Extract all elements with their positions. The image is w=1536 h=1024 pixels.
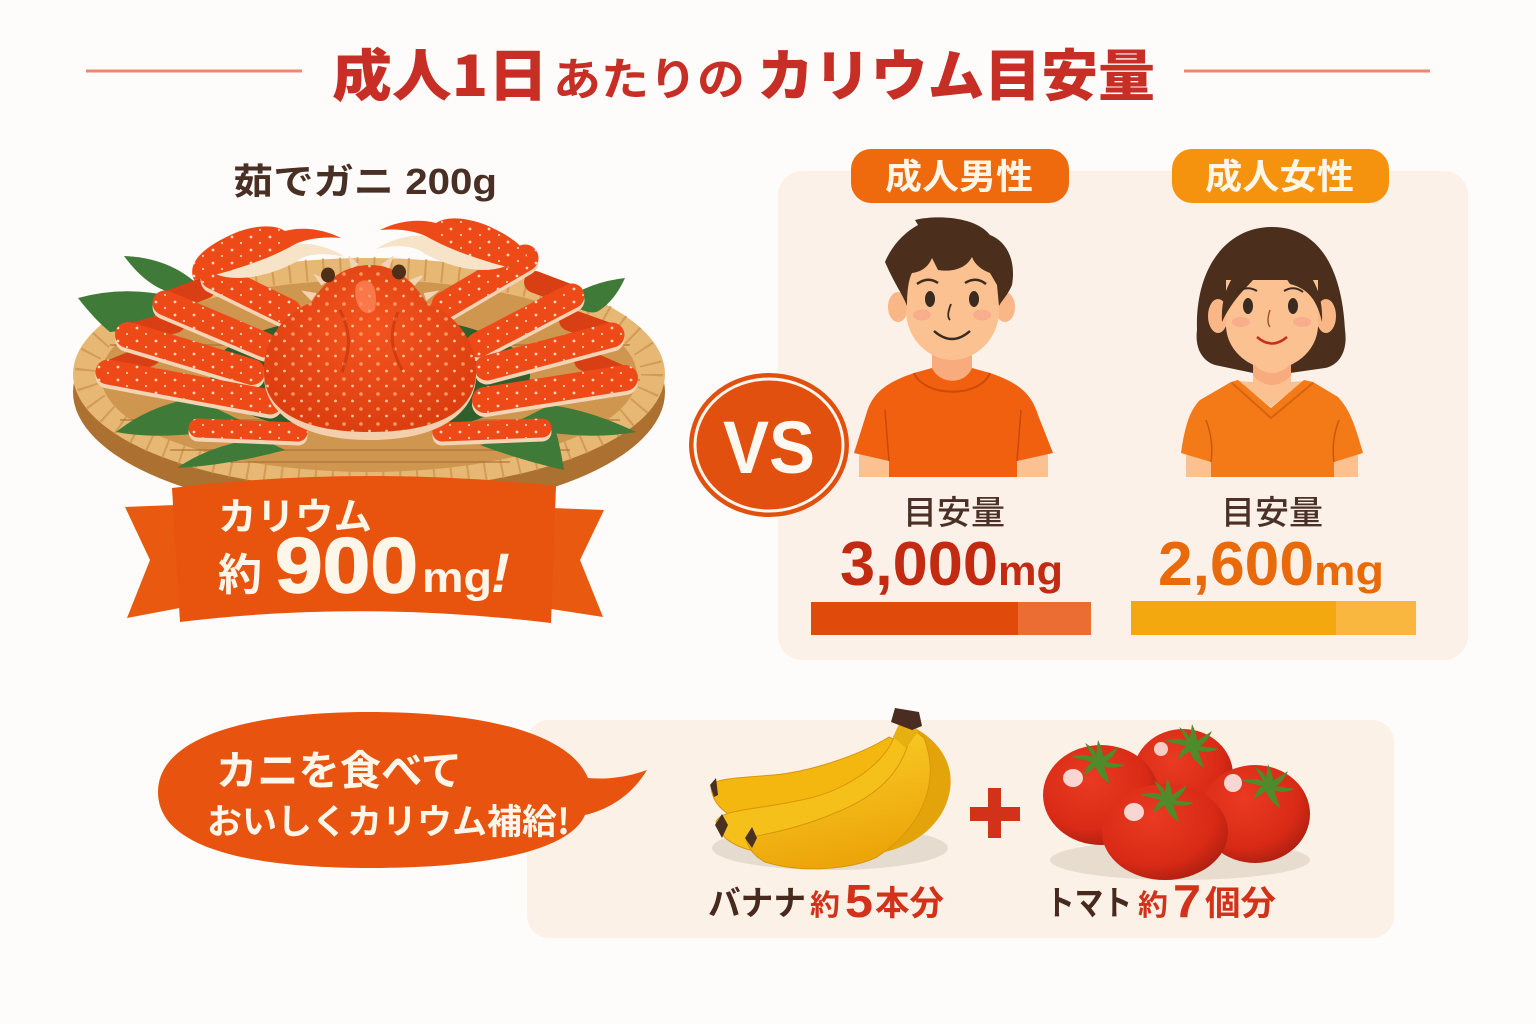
back tomato xyxy=(1133,724,1233,821)
tomato label: トマト xyxy=(1046,876,1132,925)
tomato label: 個分 xyxy=(1205,876,1276,925)
tomato label: 約 xyxy=(1138,882,1168,924)
crab legs xyxy=(108,258,625,436)
title: カリウム目安量 xyxy=(757,32,1155,113)
food panel xyxy=(527,720,1394,938)
male figure xyxy=(854,217,1053,477)
potassium ribbon banner: ! xyxy=(491,541,510,604)
female amount xyxy=(1158,486,1384,599)
banana label: 5 xyxy=(845,875,873,927)
potassium ribbon banner: 約 xyxy=(218,539,262,603)
potassium ribbon banner: 900 xyxy=(275,521,418,609)
potassium ribbon banner: カリウム xyxy=(218,486,372,541)
left claw xyxy=(192,226,345,280)
banana label xyxy=(708,875,944,927)
speech bubble: カニを食べて xyxy=(216,737,462,797)
banana label: 本分 xyxy=(875,876,944,925)
plus sign xyxy=(970,788,1020,838)
crab eyes xyxy=(321,264,406,282)
female amount: 目安量 xyxy=(1221,486,1323,534)
VS badge xyxy=(689,373,849,517)
wooden plate xyxy=(73,258,665,514)
crab heading: 茹でガニ 200g xyxy=(233,161,497,202)
tomato label: 7 xyxy=(1173,875,1201,927)
male bar xyxy=(811,602,1091,635)
title: 成人1日 xyxy=(332,32,548,113)
female amount: mg xyxy=(1314,547,1384,594)
comparison panel xyxy=(778,171,1468,660)
female amount: 2,600 xyxy=(1158,530,1314,599)
potassium ribbon banner xyxy=(125,476,604,623)
leaves xyxy=(78,256,636,470)
adult male pill: 成人男性 xyxy=(885,149,1033,200)
tomato label xyxy=(1046,875,1276,927)
adult female pill xyxy=(1172,149,1389,203)
adult male pill xyxy=(851,149,1069,203)
VS badge: VS xyxy=(723,406,815,489)
left tomato xyxy=(1043,740,1159,845)
front tomato xyxy=(1102,778,1228,880)
crab xyxy=(108,218,625,440)
male amount: 3,000 xyxy=(840,530,998,599)
male amount: mg xyxy=(998,547,1063,594)
speech bubble xyxy=(158,712,647,868)
potassium ribbon banner: mg xyxy=(422,554,492,602)
bananas xyxy=(710,708,951,870)
tomatoes xyxy=(1043,724,1310,880)
female figure xyxy=(1181,227,1363,477)
male amount: 目安量 xyxy=(903,486,1005,534)
speech bubble: おいしくカリウム補給! xyxy=(207,794,570,845)
female bar xyxy=(1131,601,1416,635)
crab shell xyxy=(264,258,476,440)
male amount xyxy=(840,486,1063,599)
title xyxy=(86,32,1430,113)
title: あたりの xyxy=(553,43,745,108)
adult female pill: 成人女性 xyxy=(1205,149,1354,200)
banana label: バナナ xyxy=(708,876,806,925)
right tomato xyxy=(1200,764,1310,863)
right claw xyxy=(376,218,529,272)
banana label: 約 xyxy=(810,882,840,924)
